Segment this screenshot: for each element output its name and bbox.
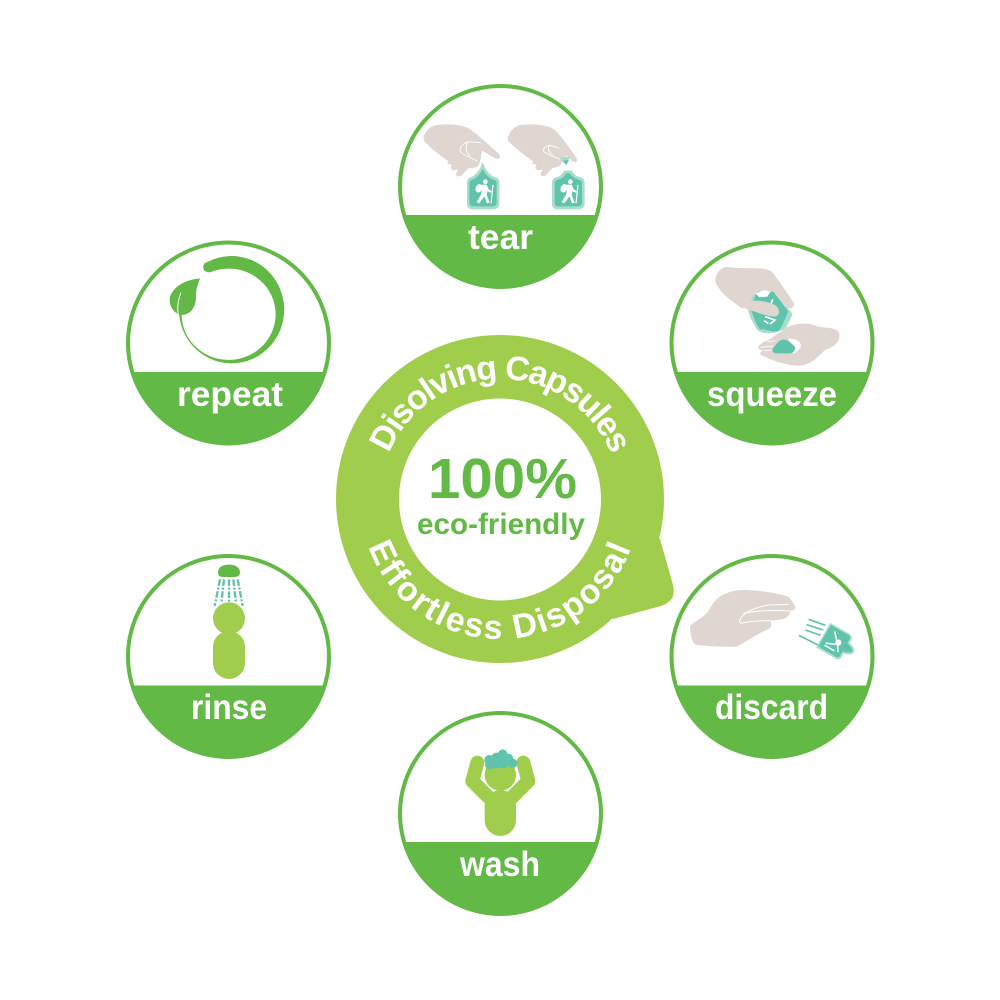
icon: leaf and cycle	[170, 256, 284, 363]
curved text: bottom: Effortless Disposal	[368, 539, 630, 640]
icon: hand throwing sachet	[690, 590, 861, 665]
band	[678, 372, 866, 442]
label: squeeze	[707, 375, 837, 414]
panel: rinse	[120, 556, 340, 766]
panel: discard	[670, 554, 874, 759]
inner white circle	[399, 398, 601, 600]
band	[134, 372, 322, 442]
icon: person washing hair	[472, 749, 528, 836]
band	[678, 686, 866, 755]
ring	[400, 86, 601, 287]
label: tear	[468, 218, 533, 257]
label: rinse	[191, 688, 267, 727]
ring	[128, 556, 329, 757]
icon: hands squeezing sachet	[715, 267, 839, 366]
label: discard	[715, 688, 828, 727]
icon: person under shower	[213, 565, 245, 679]
icons: hands and sachets	[423, 124, 585, 209]
band	[406, 842, 595, 912]
speech bubble ring	[336, 335, 674, 663]
panel: repeat	[120, 242, 340, 452]
band	[406, 215, 595, 285]
100%: 100%	[428, 447, 577, 511]
panel: squeeze	[670, 240, 874, 446]
label: wash	[459, 845, 540, 884]
label: repeat	[177, 375, 283, 414]
ring	[128, 242, 329, 444]
eco-friendly: eco-friendly	[417, 508, 585, 541]
ring	[400, 713, 601, 914]
ring	[672, 242, 872, 444]
band	[134, 686, 322, 755]
central badge	[336, 335, 674, 663]
ring	[672, 556, 872, 757]
curved text: top: Disolving Capsules	[368, 356, 626, 452]
panel: wash	[390, 713, 610, 922]
panel: tear	[390, 86, 610, 295]
